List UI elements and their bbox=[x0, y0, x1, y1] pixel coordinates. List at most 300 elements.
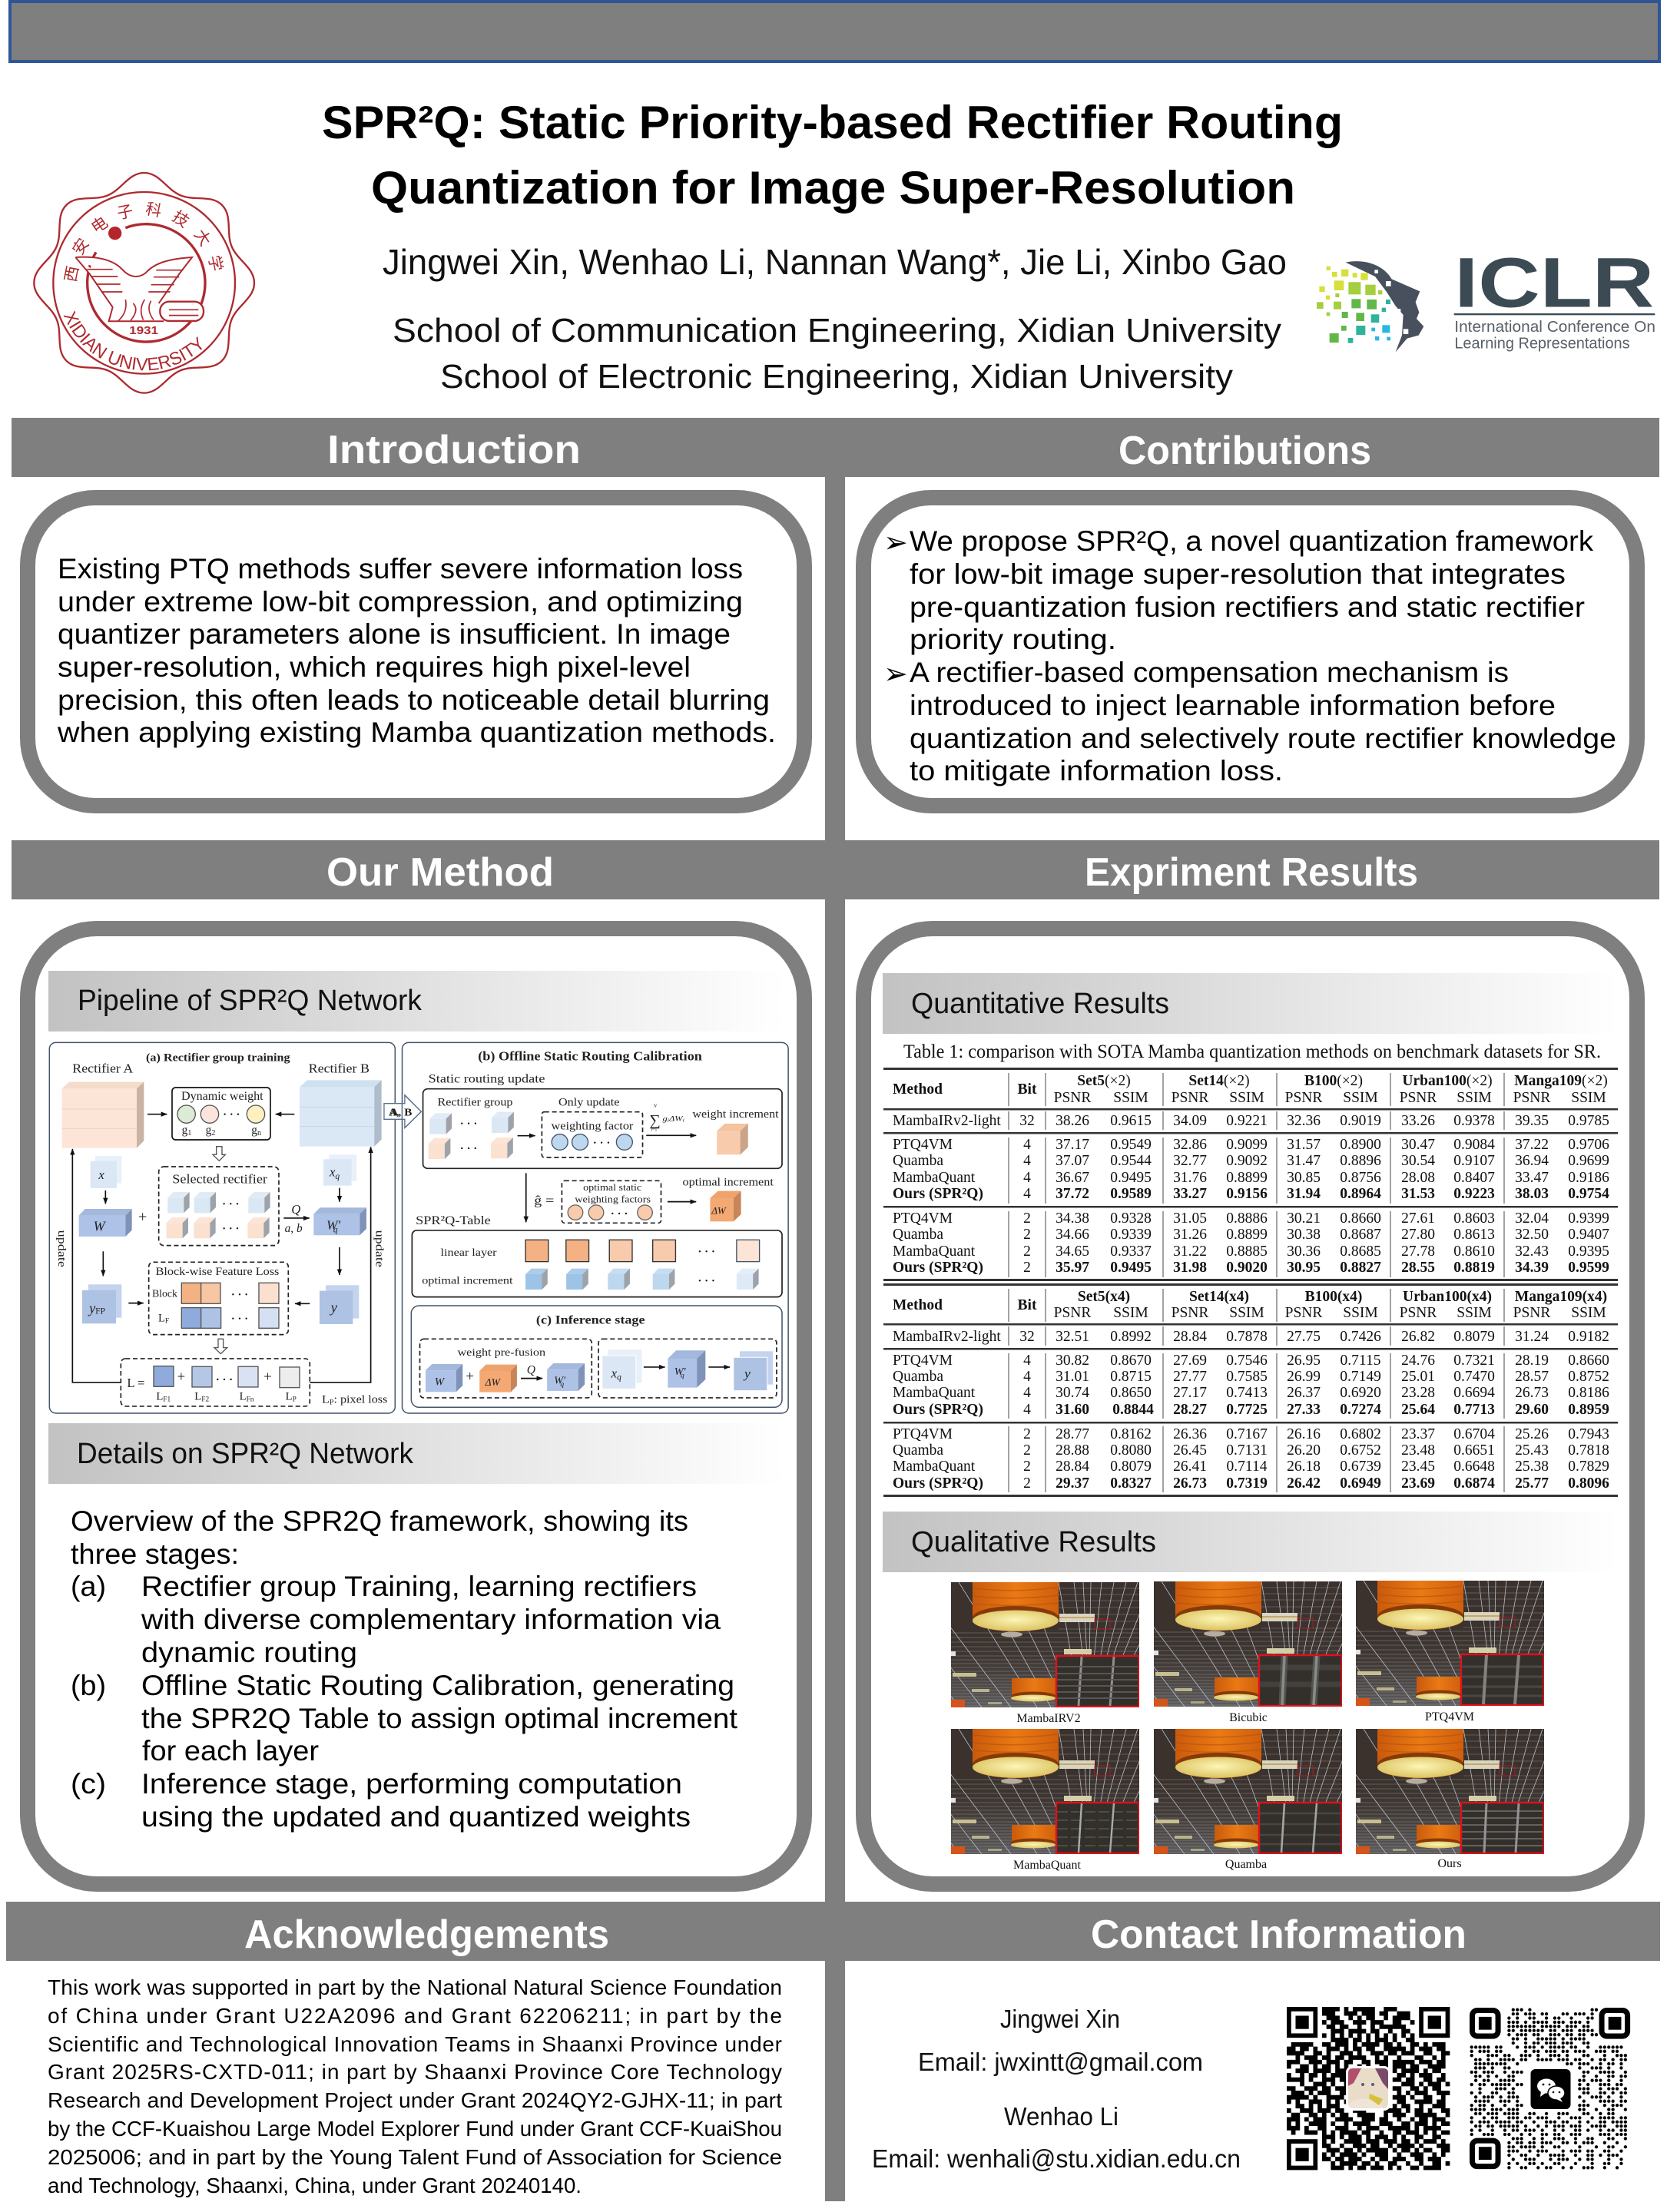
table: x4 results: 27.77 bbox=[1173, 1369, 1207, 1385]
diagram (a): rectifier group training: Block-wise Feature Loss bbox=[156, 1266, 280, 1278]
image: MambaIRV2 bbox=[913, 1582, 1147, 1725]
table: x4 results: 0.8992 bbox=[1110, 1329, 1152, 1345]
table: x2 results: 0.8687 bbox=[1340, 1227, 1381, 1243]
table: x4 results: 23.28 bbox=[1401, 1385, 1435, 1401]
diagram (a): rectifier group training: L bbox=[194, 1391, 201, 1403]
table: x4 results: 2 bbox=[1023, 1459, 1031, 1475]
table: x2 results: 32.36 bbox=[1287, 1113, 1321, 1129]
diagram (b,c): offline static routing calibration and inference stage: Static routing update bbox=[429, 1072, 545, 1085]
text block: acknowledgements: by the CCF-Kuaishou Large Model Explorer Fund under Grant CCF-KuaiShou bbox=[48, 2117, 782, 2141]
diagram (a): rectifier group training: g bbox=[182, 1124, 187, 1137]
table: x2 results: 33.26 bbox=[1401, 1113, 1435, 1129]
table: x4 results: PTQ4VM bbox=[893, 1353, 953, 1369]
diagram (a): rectifier group training: + bbox=[138, 1209, 147, 1226]
diagram (b,c): offline static routing calibration and inference stage: weighting factor bbox=[552, 1121, 633, 1133]
table: x2 results: 33.47 bbox=[1515, 1170, 1549, 1186]
diagram (a): rectifier group training: x bbox=[330, 1165, 335, 1180]
diagram (a): rectifier group training: L bbox=[286, 1391, 293, 1403]
diagram (a): rectifier group training: update bbox=[55, 1230, 68, 1267]
table: x4 results: 0.7725 bbox=[1226, 1402, 1268, 1418]
table: x2 results: PSNR bbox=[1513, 1090, 1550, 1106]
table: x4 results: 0.7319 bbox=[1226, 1475, 1268, 1492]
table: x4 results: SSIM bbox=[1571, 1305, 1606, 1321]
panel: contributions: ➢ bbox=[883, 525, 908, 559]
table: x4 results: SSIM bbox=[1343, 1305, 1378, 1321]
text block: acknowledgements: Grant 2025RS-CXTD-011; in part by Shaanxi Province Core Technology bbox=[48, 2060, 782, 2084]
diagram (b,c): offline static routing calibration and inference stage: i=1 bbox=[651, 1128, 657, 1133]
table: x2 results: 0.9495 bbox=[1110, 1170, 1152, 1186]
text block: acknowledgements: of China under Grant U22A2096 and Grant 62206211; in part by the bbox=[48, 2004, 782, 2028]
section header: Introduction and Contributions: Introduction bbox=[327, 428, 581, 472]
text block: details: with diverse complementary information via bbox=[141, 1604, 721, 1635]
text block: details: using the updated and quantized weights bbox=[141, 1801, 691, 1833]
diagram (b,c): offline static routing calibration and inference stage: linear layer bbox=[441, 1247, 497, 1259]
table: x2 results: Bit bbox=[1018, 1081, 1037, 1098]
section header: Our Method and Experiment Results: Our Method bbox=[326, 850, 554, 895]
table: x4 results: 0.8162 bbox=[1110, 1426, 1152, 1442]
logo: ICLR: International Conference On bbox=[1454, 319, 1655, 336]
table: x2 results: 0.9589 bbox=[1110, 1186, 1152, 1202]
authors: Jingwei Xin, Wenhao Li, Nannan Wang*, Jie Li, Xinbo Gao bbox=[383, 242, 1287, 282]
table: x2 results: 0.9407 bbox=[1568, 1227, 1609, 1243]
table: x2 results: PSNR bbox=[1400, 1090, 1437, 1106]
table: x4 results: 0.6949 bbox=[1340, 1475, 1381, 1492]
table: x4 results: 0.8079 bbox=[1110, 1459, 1152, 1475]
table: x4 results: 23.48 bbox=[1401, 1442, 1435, 1459]
table: x2 results: 28.08 bbox=[1401, 1170, 1435, 1186]
table: x4 results: 0.7114 bbox=[1227, 1459, 1268, 1475]
text block: contact details: Email: jwxintt@gmail.com bbox=[918, 2048, 1203, 2076]
diagram (a): rectifier group training: Dynamic weight bbox=[181, 1090, 263, 1103]
table: x2 results: 0.9395 bbox=[1568, 1243, 1609, 1260]
table: x4 results: 28.27 bbox=[1173, 1402, 1207, 1418]
image: Quamba bbox=[1115, 1729, 1350, 1871]
table: x4 results: 0.6651 bbox=[1453, 1442, 1495, 1459]
text block: acknowledgements: This work was supported in part by the National Natural Science Foundation bbox=[48, 1975, 782, 1999]
diagram (b,c): offline static routing calibration and inference stage: q bbox=[617, 1373, 621, 1382]
diagram (b,c): offline static routing calibration and inference stage: A, B bbox=[389, 1107, 412, 1119]
affiliations: School of Communication Engineering, Xidian University bbox=[393, 312, 1281, 349]
diagram (a): rectifier group training: Fn bbox=[247, 1396, 254, 1404]
table: x2 results: 32.86 bbox=[1173, 1137, 1207, 1153]
table: x2 results: 35.97 bbox=[1056, 1260, 1089, 1276]
table: x4 results: 0.8650 bbox=[1110, 1385, 1152, 1401]
table: x2 results: 0.9706 bbox=[1568, 1137, 1609, 1153]
title: Quantization for Image Super-Resolution bbox=[371, 162, 1295, 214]
table: x4 results: SSIM bbox=[1229, 1305, 1264, 1321]
table: x4 results: 0.7818 bbox=[1568, 1442, 1609, 1459]
diagram (b,c): offline static routing calibration and inference stage: (c) Inference stage bbox=[536, 1313, 645, 1326]
QR code: personal contact with cat avatar bbox=[1287, 2009, 1450, 2168]
table: x2 results: 0.9599 bbox=[1568, 1260, 1609, 1276]
table: x4 results: 0.7943 bbox=[1568, 1426, 1609, 1442]
text block: details: Overview of the SPR2Q framework, showing its bbox=[71, 1505, 688, 1537]
table: x4 results: 0.8096 bbox=[1568, 1475, 1609, 1492]
table: x4 results: 26.18 bbox=[1287, 1459, 1321, 1475]
table: x2 results: 0.9785 bbox=[1568, 1113, 1609, 1129]
table: x4 results: 25.38 bbox=[1515, 1459, 1549, 1475]
table: x4 results: 0.7585 bbox=[1226, 1369, 1268, 1385]
table: x4 results: 0.6752 bbox=[1340, 1442, 1381, 1459]
table: x4 results: 25.26 bbox=[1515, 1426, 1549, 1442]
table: x4 results: PSNR bbox=[1172, 1305, 1208, 1321]
table: x2 results: SSIM bbox=[1571, 1090, 1606, 1106]
table: x2 results: 37.72 bbox=[1056, 1186, 1089, 1202]
table: x2 results: 37.22 bbox=[1515, 1137, 1549, 1153]
table: x4 results: PSNR bbox=[1400, 1305, 1437, 1321]
text block: contact details: Wenhao Li bbox=[1004, 2102, 1119, 2131]
table: x4 results: 0.8752 bbox=[1568, 1369, 1609, 1385]
table: x2 results: 36.67 bbox=[1056, 1170, 1089, 1186]
table: x2 results: PSNR bbox=[1172, 1090, 1208, 1106]
table: x4 results: 30.82 bbox=[1056, 1353, 1089, 1369]
table: x4 results: 0.8660 bbox=[1568, 1353, 1609, 1369]
table: x2 results: SSIM bbox=[1457, 1090, 1492, 1106]
table: x4 results: 4 bbox=[1023, 1353, 1031, 1369]
table: x4 results: Manga109(x4) bbox=[1515, 1289, 1607, 1305]
table: x2 results: 34.38 bbox=[1056, 1210, 1089, 1227]
diagram (a): rectifier group training: 2 bbox=[211, 1129, 215, 1137]
image: Ours bbox=[1317, 1729, 1552, 1870]
table: x4 results: Urban100(x4) bbox=[1403, 1289, 1492, 1305]
table: x2 results: 0.9544 bbox=[1110, 1153, 1152, 1169]
diagram (b,c): offline static routing calibration and inference stage: g bbox=[663, 1115, 666, 1123]
table: x2 results: 31.98 bbox=[1173, 1260, 1207, 1276]
table: x2 results: 0.8964 bbox=[1340, 1186, 1381, 1202]
table: x2 results: 0.9156 bbox=[1226, 1186, 1268, 1202]
diagram (a): rectifier group training: x bbox=[98, 1167, 104, 1182]
table: x2 results: 32.43 bbox=[1515, 1243, 1549, 1260]
diagram (a): rectifier group training: F bbox=[165, 1318, 169, 1326]
diagram (a): rectifier group training: P bbox=[330, 1399, 334, 1407]
table: x4 results: SSIM bbox=[1113, 1305, 1148, 1321]
table: x4 results: 27.17 bbox=[1173, 1385, 1207, 1401]
table: x4 results: 0.7426 bbox=[1340, 1329, 1381, 1345]
diagram (b,c): offline static routing calibration and inference stage: optimal static bbox=[583, 1182, 642, 1193]
diagram (a): rectifier group training: A, B bbox=[389, 1108, 409, 1119]
diagram (a): rectifier group training: + bbox=[263, 1369, 272, 1386]
table: x4 results: 26.99 bbox=[1287, 1369, 1321, 1385]
image: Bicubic bbox=[1115, 1581, 1350, 1724]
table: x4 results: Ours (SPR²Q) bbox=[893, 1402, 983, 1418]
diagram (b,c): offline static routing calibration and inference stage: i bbox=[683, 1119, 684, 1124]
table: x4 results: 0.8079 bbox=[1453, 1329, 1495, 1345]
panel: contributions: to mitigate information loss. bbox=[910, 755, 1283, 786]
table: x2 results: 2 bbox=[1023, 1260, 1031, 1276]
logo: Xidian University seal: 1931 bbox=[129, 325, 158, 337]
table: x4 results: 26.41 bbox=[1173, 1459, 1207, 1475]
table: x4 results: 2 bbox=[1023, 1442, 1031, 1459]
heading: details: Details on SPR²Q Network bbox=[77, 1438, 414, 1470]
text block: details: (c) bbox=[71, 1768, 106, 1800]
section header: Introduction and Contributions bbox=[12, 418, 1659, 477]
table: x4 results: 31.01 bbox=[1056, 1369, 1089, 1385]
diagram (b,c): offline static routing calibration and inference stage: Only update bbox=[558, 1096, 620, 1108]
table: x2 results: 39.35 bbox=[1515, 1113, 1549, 1129]
table: x2 results: 0.9099 bbox=[1226, 1137, 1268, 1153]
diagram (a): rectifier group training: Rectifier B bbox=[309, 1061, 370, 1076]
table: x4 results: PTQ4VM bbox=[893, 1426, 953, 1442]
table: x4 results: 23.37 bbox=[1401, 1426, 1435, 1442]
table: x4 results: 26.37 bbox=[1287, 1385, 1321, 1401]
diagram (a): rectifier group training: W′ bbox=[326, 1218, 340, 1233]
table: x2 results: SSIM bbox=[1113, 1090, 1148, 1106]
diagram (a): rectifier group training: n bbox=[257, 1129, 261, 1137]
table: x4 results: PSNR bbox=[1285, 1305, 1322, 1321]
table: x2 results: 0.9221 bbox=[1226, 1113, 1268, 1129]
table: x2 results: 38.03 bbox=[1515, 1186, 1549, 1202]
table: x2 results: 31.53 bbox=[1401, 1186, 1435, 1202]
table: x2 results: 0.8896 bbox=[1340, 1153, 1381, 1169]
table: x4 results: Quamba bbox=[893, 1369, 943, 1385]
table: x4 results: 0.8670 bbox=[1110, 1353, 1152, 1369]
diagram (b,c): offline static routing calibration and inference stage: + bbox=[466, 1369, 474, 1385]
panel: experiment results bbox=[863, 929, 1637, 1884]
table: x4 results: 26.73 bbox=[1173, 1475, 1207, 1492]
diagram (a): rectifier group training bbox=[49, 1042, 421, 1413]
table: x2 results: SSIM bbox=[1343, 1090, 1378, 1106]
table: x4 results: PSNR bbox=[1054, 1305, 1091, 1321]
table: x2 results: B100(×2) bbox=[1304, 1073, 1363, 1089]
table: x4 results: 0.7878 bbox=[1226, 1329, 1268, 1345]
diagram (a): rectifier group training: g bbox=[251, 1124, 257, 1137]
panel: contributions: pre-quantization fusion rectifiers and static rectifier bbox=[910, 591, 1585, 623]
table: x4 results: 32.51 bbox=[1056, 1329, 1089, 1345]
diagram (a): rectifier group training: Q bbox=[291, 1202, 300, 1217]
diagram (b,c): offline static routing calibration and inference stage: W′ bbox=[674, 1366, 686, 1378]
diagram (b,c): offline static routing calibration and inference stage: i bbox=[668, 1119, 669, 1124]
diagram (b,c): offline static routing calibration and inference stage bbox=[389, 1042, 788, 1413]
table: x4 results: 0.7829 bbox=[1568, 1459, 1609, 1475]
table: x2 results: 31.26 bbox=[1173, 1227, 1207, 1243]
table: x2 results: 0.9019 bbox=[1340, 1113, 1381, 1129]
table: x2 results: 30.36 bbox=[1287, 1243, 1321, 1260]
table: x4 results: 30.74 bbox=[1056, 1385, 1089, 1401]
table: x2 results: 0.8756 bbox=[1340, 1170, 1381, 1186]
diagram (b,c): offline static routing calibration and inference stage: N bbox=[653, 1104, 658, 1109]
table: x4 results: 28.57 bbox=[1515, 1369, 1549, 1385]
heading: pipeline: Pipeline of SPR²Q Network bbox=[78, 985, 423, 1017]
table: x2 results: PSNR bbox=[1054, 1090, 1091, 1106]
table: x2 results: 0.8610 bbox=[1453, 1243, 1495, 1260]
image: MambaIRV2: MambaIRV2 bbox=[1016, 1712, 1081, 1725]
text block: acknowledgements: Scientific and Technological Innovation Teams in Shaanxi Province under bbox=[48, 2032, 782, 2056]
image: MambaQuant: MambaQuant bbox=[1013, 1859, 1082, 1872]
title bbox=[322, 97, 1343, 214]
diagram (a): rectifier group training: L = bbox=[127, 1376, 144, 1390]
title: SPR²Q: Static Priority-based Rectifier Routing bbox=[322, 97, 1343, 148]
table: x2 results: 0.8685 bbox=[1340, 1243, 1381, 1260]
table: x2 results: 31.76 bbox=[1173, 1170, 1207, 1186]
table: x4 results: 31.60 bbox=[1056, 1402, 1089, 1418]
table: x2 results: MambaQuant bbox=[893, 1170, 976, 1186]
table: x4 results: 28.88 bbox=[1056, 1442, 1089, 1459]
table: x2 results: 0.9092 bbox=[1226, 1153, 1268, 1169]
table: x4 results: 25.64 bbox=[1401, 1402, 1435, 1418]
table: x4 results: 0.6920 bbox=[1340, 1385, 1381, 1401]
table: x4 results: 0.7131 bbox=[1226, 1442, 1268, 1459]
table: x4 results: Method bbox=[893, 1297, 943, 1313]
table: x4 results: PSNR bbox=[1513, 1305, 1550, 1321]
table: x2 results: 27.78 bbox=[1401, 1243, 1435, 1260]
table: x2 results: 2 bbox=[1023, 1243, 1031, 1260]
table: x2 results: 30.95 bbox=[1287, 1260, 1321, 1276]
table: x4 results: 26.95 bbox=[1287, 1353, 1321, 1369]
table: x2 results: 38.26 bbox=[1056, 1113, 1089, 1129]
text block: details: Inference stage, performing computation bbox=[141, 1768, 682, 1800]
table: x2 results: 0.8899 bbox=[1226, 1227, 1268, 1243]
table: x4 results: 0.8844 bbox=[1112, 1402, 1154, 1418]
table: x4 results: 26.36 bbox=[1173, 1426, 1207, 1442]
table: x2 results: 0.9615 bbox=[1110, 1113, 1152, 1129]
text block: acknowledgements: and Technology, Shaanxi, China, under Grant 20240140. bbox=[48, 2174, 582, 2197]
panel: contributions bbox=[863, 498, 1637, 806]
table: x2 results: 0.9495 bbox=[1110, 1260, 1152, 1276]
table: x2 results: 34.65 bbox=[1056, 1243, 1089, 1260]
diagram (a): rectifier group training: W bbox=[94, 1218, 107, 1233]
table: x4 results: Set14(x4) bbox=[1189, 1289, 1249, 1305]
image: PTQ4VM bbox=[1317, 1581, 1552, 1724]
table caption: Table 1: comparison with SOTA Mamba quantization methods on benchmark datasets for SR. bbox=[903, 1041, 1601, 1062]
text block: details: Rectifier group Training, learning rectifiers bbox=[141, 1571, 697, 1602]
diagram (b,c): offline static routing calibration and inference stage: q bbox=[560, 1381, 564, 1389]
table: x4 results: 0.7546 bbox=[1226, 1353, 1268, 1369]
table: x2 results: 0.9378 bbox=[1453, 1113, 1495, 1129]
table: x2 results: 30.21 bbox=[1287, 1210, 1321, 1227]
diagram (a): rectifier group training: a, b bbox=[285, 1222, 303, 1235]
panel: our method bbox=[28, 929, 804, 1884]
table: x2 results: 30.38 bbox=[1287, 1227, 1321, 1243]
affiliations bbox=[393, 312, 1281, 396]
diagram (a): rectifier group training: FP bbox=[95, 1307, 105, 1316]
table: x2 results: 31.57 bbox=[1287, 1137, 1321, 1153]
table: x2 results: 34.66 bbox=[1056, 1227, 1089, 1243]
diagram (a): rectifier group training: L bbox=[158, 1313, 165, 1325]
table: x4 results: 0.6802 bbox=[1340, 1426, 1381, 1442]
image: Ours: Ours bbox=[1437, 1857, 1462, 1870]
table: x2 results: 32.77 bbox=[1173, 1153, 1207, 1169]
section header: Our Method and Experiment Results: Expriment Results bbox=[1085, 850, 1418, 895]
heading: qualitative results bbox=[883, 1512, 1618, 1572]
text block: details: (a) bbox=[71, 1571, 106, 1602]
table: x2 results: 30.47 bbox=[1401, 1137, 1435, 1153]
table: x4 results bbox=[883, 1283, 1618, 1497]
diagram (a): rectifier group training: update bbox=[373, 1230, 385, 1267]
diagram (a): rectifier group training: + bbox=[177, 1369, 185, 1386]
image: MambaQuant bbox=[913, 1729, 1147, 1872]
diagram (a): rectifier group training: q bbox=[335, 1172, 340, 1181]
diagram (a): rectifier group training: Block bbox=[152, 1287, 177, 1299]
table: x4 results: 0.7713 bbox=[1453, 1402, 1495, 1418]
table: x2 results: 0.8900 bbox=[1340, 1137, 1381, 1153]
table: x2 results: PTQ4VM bbox=[893, 1137, 953, 1153]
table: x4 results: 0.6648 bbox=[1453, 1459, 1495, 1475]
table: x4 results: 0.7149 bbox=[1340, 1369, 1381, 1385]
table: x2 results: 0.9107 bbox=[1453, 1153, 1495, 1169]
diagram (a): rectifier group training: y bbox=[330, 1300, 338, 1316]
table: x2 results: 37.17 bbox=[1056, 1137, 1089, 1153]
diagram (b,c): offline static routing calibration and inference stage: optimal increment bbox=[422, 1275, 513, 1287]
panel: contributions: quantization and selectively route rectifier knowledge bbox=[910, 723, 1616, 754]
table: x2 results: Quamba bbox=[893, 1153, 943, 1169]
diagram (b,c): offline static routing calibration and inference stage: (b) Offline Static Routing Calibration bbox=[478, 1049, 703, 1064]
table: x2 results: 31.22 bbox=[1173, 1243, 1207, 1260]
table: x4 results: 27.69 bbox=[1173, 1353, 1207, 1369]
table: x2 results: 36.94 bbox=[1515, 1153, 1549, 1169]
table: x2 results: 0.8819 bbox=[1453, 1260, 1495, 1276]
table: x4 results: MambaIRv2-light bbox=[893, 1329, 1001, 1345]
table: x2 results: 31.47 bbox=[1287, 1153, 1321, 1169]
table: x2 results: 34.09 bbox=[1173, 1113, 1207, 1129]
table: x2 results: Set14(×2) bbox=[1188, 1073, 1250, 1089]
table: x4 results: 4 bbox=[1023, 1369, 1031, 1385]
table: x4 results: 28.84 bbox=[1173, 1329, 1207, 1345]
table: x4 results: 31.24 bbox=[1515, 1329, 1549, 1345]
panel: introduction: when applying existing Mamba quantization methods. bbox=[57, 717, 776, 748]
table: x4 results: 0.7413 bbox=[1226, 1385, 1268, 1401]
table: x2 results: 0.8886 bbox=[1226, 1210, 1268, 1227]
heading: quantitative results: Quantitative Results bbox=[911, 988, 1169, 1020]
logo: Xidian University seal bbox=[33, 172, 255, 394]
table: x2 results: 0.9337 bbox=[1110, 1243, 1152, 1260]
logo: Xidian University seal: XIDIAN UNIVERSITY bbox=[63, 310, 202, 370]
table: x4 results: 0.9182 bbox=[1568, 1329, 1609, 1345]
table: x4 results: 4 bbox=[1023, 1385, 1031, 1401]
diagram (b,c): offline static routing calibration and inference stage: weight pre-fusion bbox=[458, 1346, 545, 1359]
table: x2 results: PSNR bbox=[1285, 1090, 1322, 1106]
table: x2 results: Ours (SPR²Q) bbox=[893, 1186, 983, 1202]
text block: details: for each layer bbox=[142, 1735, 319, 1767]
diagram (b,c): offline static routing calibration and inference stage: ĝ = bbox=[534, 1193, 554, 1207]
table: x4 results: MambaQuant bbox=[893, 1459, 976, 1475]
table: x2 results: 32.50 bbox=[1515, 1227, 1549, 1243]
text block: details: (b) bbox=[71, 1670, 106, 1701]
table: x4 results: 25.77 bbox=[1515, 1475, 1549, 1492]
diagram (a): rectifier group training: (a) Rectifier group training bbox=[146, 1052, 290, 1065]
table: x2 results: 37.07 bbox=[1056, 1153, 1089, 1169]
table: x2 results: Ours (SPR²Q) bbox=[893, 1260, 983, 1276]
text block: details: dynamic routing bbox=[141, 1637, 357, 1668]
diagram (a): rectifier group training: y bbox=[89, 1300, 95, 1316]
table: x2 results: 0.9020 bbox=[1226, 1260, 1268, 1276]
text block: details bbox=[71, 1505, 738, 1833]
table: x2 results: 31.05 bbox=[1173, 1210, 1207, 1227]
table: x2 results: 4 bbox=[1023, 1153, 1031, 1169]
table: x2 results: 27.61 bbox=[1401, 1210, 1435, 1227]
table: x2 results: SSIM bbox=[1229, 1090, 1264, 1106]
text block: contact details: Email: wenhali@stu.xidian.edu.cn bbox=[872, 2144, 1241, 2173]
section header: Our Method and Experiment Results bbox=[12, 840, 1659, 899]
table: x4 results: 4 bbox=[1023, 1402, 1031, 1418]
table: x4 results: 28.77 bbox=[1056, 1426, 1089, 1442]
table: x2 results: 0.8660 bbox=[1340, 1210, 1381, 1227]
heading: pipeline bbox=[48, 971, 784, 1031]
table: x2 results: 0.9328 bbox=[1110, 1210, 1152, 1227]
table: x2 results: 0.9223 bbox=[1453, 1186, 1495, 1202]
table: x4 results: 0.7115 bbox=[1341, 1353, 1380, 1369]
diagram (b,c): offline static routing calibration and inference stage: W′ bbox=[554, 1375, 565, 1387]
table: x2 results: 0.8613 bbox=[1453, 1227, 1495, 1243]
diagram (a): rectifier group training: L bbox=[240, 1391, 247, 1403]
text block: details: three stages: bbox=[71, 1538, 239, 1570]
diagram (a): rectifier group training: F2 bbox=[201, 1396, 209, 1404]
panel: contributions: for low-bit image super-resolution that integrates bbox=[910, 558, 1566, 590]
table: x4 results: 28.19 bbox=[1515, 1353, 1549, 1369]
table: x2 results: 31.94 bbox=[1287, 1186, 1321, 1202]
diagram (b,c): offline static routing calibration and inference stage: Rectifier group bbox=[437, 1096, 513, 1108]
section header: Acknowledgements and Contact Information: Acknowledgements bbox=[244, 1912, 609, 1957]
diagram (a): rectifier group training: Rectifier A bbox=[72, 1061, 133, 1076]
